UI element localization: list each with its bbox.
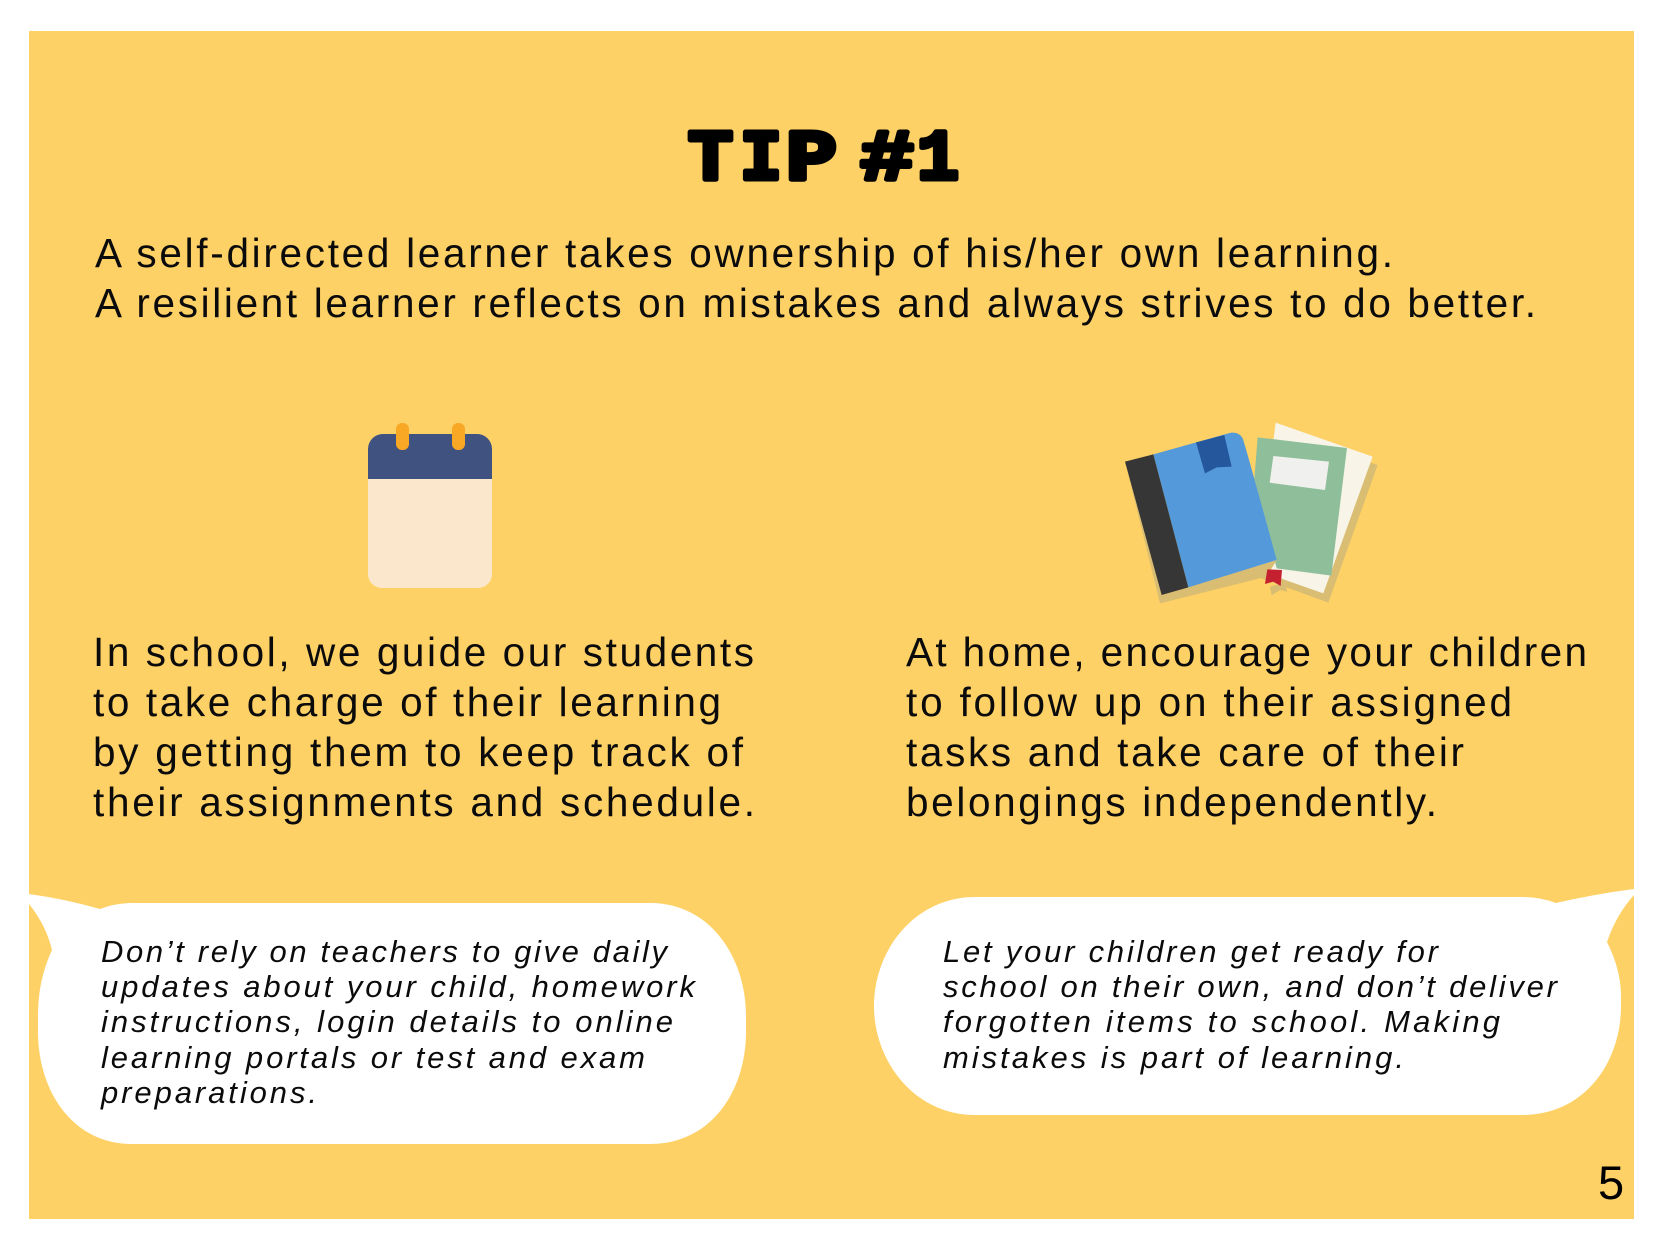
title: P (786, 121, 837, 201)
speech bubble: left: updates about your child, homework (101, 969, 696, 1004)
intro text block: A resilient learner reflects on mistakes and always strives to do better. (95, 280, 1536, 326)
text block: at home: At home, encourage your children (906, 629, 1587, 675)
speech bubble: right (874, 889, 1634, 1115)
page number: 5 (1598, 1156, 1624, 1209)
text block: in school: their assignments and schedule. (93, 779, 755, 825)
speech bubble: right: school on their own, and don’t deliver (943, 969, 1559, 1004)
text block: in school: by getting them to keep track of (93, 729, 744, 775)
speech bubble: right: forgotten items to school. Making (943, 1004, 1500, 1039)
speech bubble: left: instructions, login details to online (101, 1004, 673, 1039)
title: # (860, 121, 914, 201)
intro text block (95, 230, 1536, 326)
icon: calendar (368, 423, 492, 588)
speech bubble: left (29, 894, 746, 1144)
text block: at home: belongings independently. (906, 779, 1437, 825)
title: 1 (917, 121, 959, 201)
icon: books (1125, 423, 1378, 603)
speech bubble: right: mistakes is part of learning. (943, 1040, 1404, 1075)
speech bubble: left: preparations. (100, 1075, 317, 1110)
speech bubble: left: learning portals or test and exam (101, 1040, 645, 1075)
title (688, 121, 959, 201)
text block: in school (93, 629, 755, 825)
text block: in school: to take charge of their learning (93, 679, 721, 725)
title: I (740, 121, 782, 201)
text block: in school: In school, we guide our students (93, 629, 754, 675)
text block: at home: to follow up on their assigned (906, 679, 1512, 725)
text block: at home (906, 629, 1587, 825)
title: T (688, 121, 733, 201)
speech bubble: left: Don’t rely on teachers to give daily (101, 934, 670, 969)
speech bubble: right: Let your children get ready for (943, 934, 1440, 969)
text block: at home: tasks and take care of their (906, 729, 1464, 775)
intro text block: A self-directed learner takes ownership of his/her own learning. (95, 230, 1393, 276)
